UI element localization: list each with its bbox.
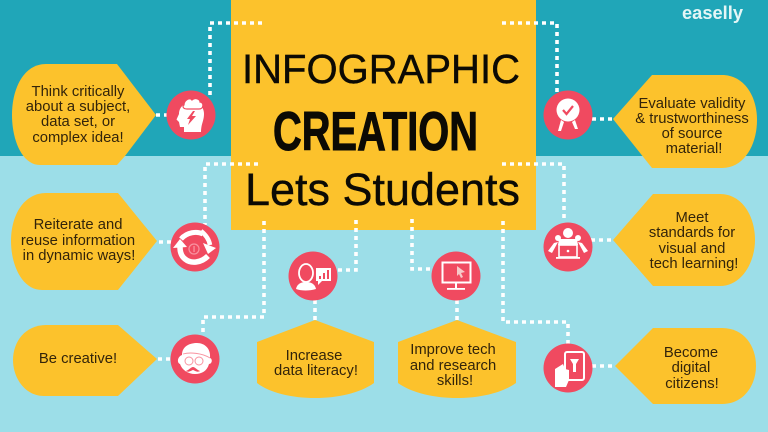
panel: evaluate validity: Evaluate validity	[639, 96, 746, 112]
icon: circular arrows	[170, 222, 220, 272]
panel: improve tech: and research	[410, 358, 496, 374]
icon: team around laptop	[544, 222, 592, 272]
panel: think critically: data set, or	[41, 114, 115, 130]
panel: reiterate: Reiterate and	[34, 217, 122, 233]
panel: increase data literacy: Increase	[286, 348, 342, 364]
panel: evaluate validity: material!	[666, 141, 722, 157]
panel: digital citizens: Become	[664, 345, 718, 361]
panel: digital citizens: citizens!	[665, 376, 719, 392]
panel: central title block	[231, 0, 536, 230]
title line: CREATION: CREATION	[273, 100, 478, 162]
panel: evaluate validity: & trustworthiness	[635, 111, 749, 127]
icon: rosette with check	[544, 90, 592, 140]
logo: easelly: easelly	[682, 2, 744, 23]
icon: face with beret and moustache	[170, 334, 220, 384]
panel: reiterate: reuse information	[21, 233, 135, 249]
panel: evaluate validity	[613, 75, 757, 168]
icon: person with chart bubble	[288, 252, 338, 300]
dotted connectors	[156, 23, 615, 366]
title line: Lets Students: Lets Students	[245, 164, 520, 215]
panel: meet standards: standards for	[649, 225, 735, 241]
panel: meet standards: tech learning!	[650, 256, 738, 272]
background: upper teal band	[0, 0, 768, 156]
panel: digital citizens: digital	[672, 360, 710, 376]
panel: be creative: Be creative!	[39, 351, 117, 367]
title	[242, 46, 520, 215]
icon: computer monitor with cursor	[432, 252, 480, 300]
panel: improve tech: Improve tech	[410, 342, 496, 358]
panel: reiterate	[11, 193, 157, 290]
panel: think critically: complex idea!	[32, 130, 124, 146]
panel: think critically: Think critically	[32, 84, 125, 100]
icon: head with storm cloud	[166, 90, 216, 140]
panel: improve tech	[398, 320, 516, 398]
panel: reiterate: in dynamic ways!	[23, 248, 135, 264]
title line: INFOGRAPHIC: INFOGRAPHIC	[242, 46, 520, 92]
icon: hand holding tablet	[544, 344, 592, 392]
panel: meet standards: Meet	[676, 210, 708, 226]
panel: increase data literacy: data literacy!	[274, 363, 358, 379]
panel: digital citizens	[615, 328, 756, 404]
panel: be creative	[13, 325, 157, 396]
panel: increase data literacy	[257, 320, 374, 398]
panel: evaluate validity: of source	[662, 126, 722, 142]
panel: think critically	[12, 64, 156, 165]
panel: think critically: about a subject,	[26, 99, 130, 115]
background: lower light blue band	[0, 156, 768, 432]
panel: meet standards: visual and	[659, 241, 725, 257]
panel: meet standards	[613, 194, 755, 286]
panel: improve tech: skills!	[437, 373, 473, 389]
